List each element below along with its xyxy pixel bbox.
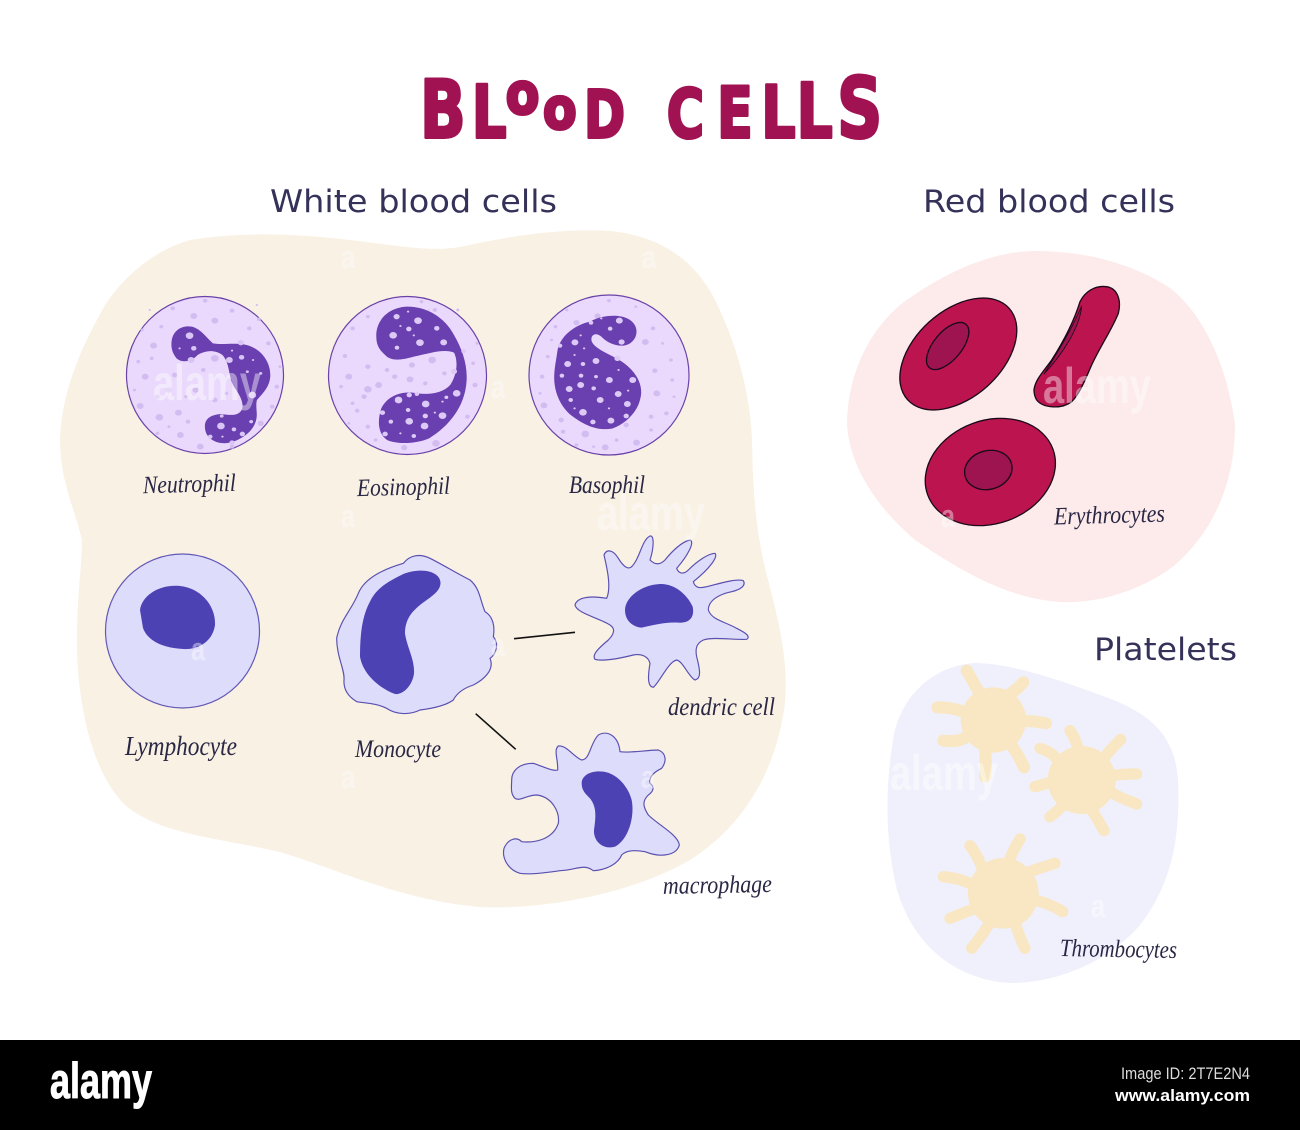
connector line: monocyte to dendritic cell [514, 632, 575, 639]
panel: white blood cells [60, 230, 786, 907]
title: L [472, 71, 507, 156]
title: O [544, 91, 575, 139]
watermarks: alamy [1043, 358, 1151, 414]
watermarks: alamy [890, 745, 998, 801]
watermarks: a [341, 239, 355, 275]
title: O [507, 76, 538, 124]
label: basophil: Basophil [569, 472, 645, 499]
watermarks [153, 239, 1151, 924]
dendritic cell [575, 536, 748, 687]
label: eosinophil: Eosinophil [356, 473, 450, 502]
label: thrombocytes: Thrombocytes [1060, 935, 1177, 964]
title: D [584, 76, 625, 153]
watermarks: a [341, 498, 355, 534]
label: dendric cell: dendric cell [668, 694, 775, 721]
lymphocyte cell [106, 554, 260, 708]
watermarks: a [491, 369, 505, 405]
label: monocyte: Monocyte [354, 736, 441, 763]
connector line: monocyte to macrophage [476, 714, 516, 749]
title: S [837, 59, 882, 158]
footer logo: alamy [50, 1053, 152, 1109]
label: neutrophil: Neutrophil [142, 470, 236, 499]
heading: platelets: Platelets [1094, 632, 1237, 668]
title: C [667, 75, 704, 154]
footer image id: Image ID: 2T7E2N4 [1121, 1064, 1250, 1083]
heading: white blood cells: White blood cells [270, 184, 557, 220]
watermarks: a [191, 631, 205, 667]
watermarks: alamy [153, 355, 261, 411]
watermarks: a [642, 239, 656, 275]
footer bar [0, 1040, 1300, 1130]
panel: red blood cells [847, 251, 1235, 602]
heading: red blood cells: Red blood cells [923, 184, 1175, 220]
title: L [761, 72, 796, 156]
basophil cell [529, 295, 689, 455]
watermarks: a [491, 627, 505, 663]
watermarks: alamy [597, 485, 705, 541]
eosinophil cell [328, 296, 486, 454]
watermarks: a [941, 498, 955, 534]
panel: platelets [887, 663, 1178, 983]
neutrophil cell [126, 296, 284, 454]
monocyte cell [337, 556, 497, 714]
label: macrophage: macrophage [663, 871, 772, 900]
title: E [717, 73, 753, 154]
label: erythrocytes: Erythrocytes [1053, 501, 1165, 530]
title: B [420, 63, 466, 157]
watermarks: a [341, 759, 355, 795]
watermarks: a [1091, 888, 1105, 924]
footer url: www.alamy.com [1114, 1086, 1250, 1105]
watermarks: a [641, 759, 655, 795]
label: lymphocyte: Lymphocyte [124, 731, 237, 761]
thrombocytes illustration [937, 671, 1137, 948]
title: L [797, 67, 833, 156]
title [420, 59, 882, 158]
erythrocytes illustration [879, 276, 1119, 543]
macrophage cell [504, 733, 679, 874]
